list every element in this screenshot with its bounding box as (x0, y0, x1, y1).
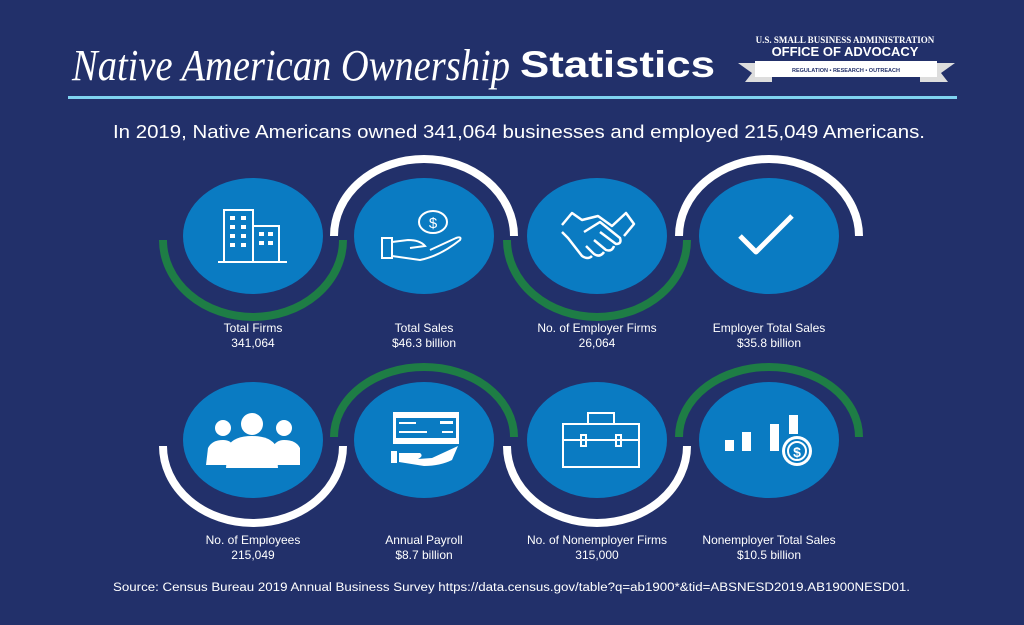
icon: hand with coin: $ (429, 215, 438, 232)
icon: briefcase (563, 413, 639, 467)
panel: nonemployer firms: No. of Nonemployer Firms (527, 533, 667, 547)
panel: total firms: 341,064 (231, 336, 275, 350)
logo: office of advocacy: U.S. SMALL BUSINESS ADMINISTRATION (756, 35, 935, 45)
panel: total sales: Total Sales (395, 321, 453, 335)
icon: people (206, 413, 300, 468)
panel: total sales: $46.3 billion (392, 336, 456, 350)
icon: hand with coin (382, 211, 460, 260)
icon: bars and coin: $ (793, 444, 801, 460)
icon: handshake (562, 213, 634, 258)
panel: annual payroll (354, 382, 494, 562)
panel: employees: 215,049 (231, 548, 275, 562)
panel: employer firms: No. of Employer Firms (537, 321, 657, 335)
icon: bars and coin (725, 415, 812, 466)
panel: nonemployer total sales (699, 382, 839, 562)
panel: employees (183, 382, 323, 562)
source: Source: Census Bureau 2019 Annual Business Survey https://data.census.gov/table?q=ab1900*&tid=ABSNESD2019.AB1900NESD01. (113, 582, 910, 594)
panel: employees: No. of Employees (206, 533, 300, 547)
icon: buildings (218, 210, 287, 262)
icon: checkmark (740, 216, 792, 252)
panel: employer total sales: Employer Total Sales (713, 321, 825, 335)
panel: total firms (183, 178, 323, 350)
panel: nonemployer firms (527, 382, 667, 562)
panel: annual payroll: Annual Payroll (385, 533, 463, 547)
logo: office of advocacy: REGULATION • RESEARCH • OUTREACH (792, 68, 900, 74)
panel: employer total sales (699, 178, 839, 350)
row 2 arcs (163, 367, 859, 523)
logo: office of advocacy (738, 35, 955, 82)
panel: nonemployer firms: 315,000 (575, 548, 619, 562)
panel: employer total sales: $35.8 billion (737, 336, 801, 350)
panel: annual payroll: $8.7 billion (395, 548, 453, 562)
panel: employer firms (527, 178, 667, 350)
row 1 arcs (163, 159, 859, 317)
logo: office of advocacy: OFFICE OF ADVOCACY (772, 44, 919, 59)
panel: employer firms: 26,064 (579, 336, 616, 350)
subtitle: In 2019, Native Americans owned 341,064 businesses and employed 215,049 Americans. (113, 122, 925, 142)
panel: nonemployer total sales: Nonemployer Total Sales (702, 533, 836, 547)
panel: nonemployer total sales: $10.5 billion (737, 548, 801, 562)
panel: total firms: Total Firms (224, 321, 282, 335)
icon: check and hand (391, 412, 459, 466)
title: Native American Ownership (71, 41, 510, 90)
panel: total sales (354, 178, 494, 350)
title: Statistics (520, 44, 715, 85)
